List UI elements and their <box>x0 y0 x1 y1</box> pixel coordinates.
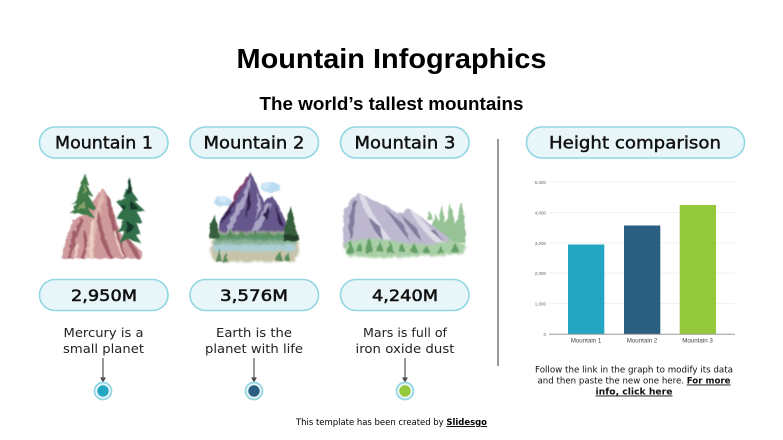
illustration: grey ridge with green forest <box>343 192 466 258</box>
heading pill: height comparison: Height comparison <box>549 134 721 154</box>
heading pill: mountain 3 <box>340 127 469 158</box>
heading pill: mountain 2 <box>190 127 318 158</box>
note: chart instructions: info, click here <box>596 386 672 398</box>
value pill: 2,950M <box>40 280 168 310</box>
illustration: pink mountain with pine trees <box>62 173 145 259</box>
y axis labels: 4,000 <box>535 210 546 216</box>
illustration: purple peaks with lake <box>209 173 299 262</box>
x axis labels: Mountain 2 <box>627 338 658 344</box>
description: mountain 1: small planet <box>63 341 144 356</box>
description: mountain 2: planet with life <box>205 341 303 356</box>
subtitle: The world’s tallest mountains <box>260 93 524 114</box>
heading pill: mountain 3: Mountain 3 <box>354 134 456 154</box>
value pill: 2,950M: 2,950M <box>71 286 137 305</box>
description: mountain 2: Earth is the <box>216 325 292 340</box>
heading pill: mountain 1 <box>40 127 168 158</box>
marker: mountain 3 <box>396 382 414 400</box>
marker: mountain 2 <box>246 382 262 400</box>
value pill: 4,240M: 4,240M <box>372 286 438 305</box>
bar: mountain 2 <box>624 226 660 334</box>
y axis labels: 3,000 <box>535 241 546 246</box>
note: chart instructions: Follow the link in the graph to modify its data <box>535 364 733 376</box>
heading pill: height comparison <box>526 127 744 158</box>
x axis labels <box>571 338 713 344</box>
heading pill: mountain 2: Mountain 2 <box>204 134 304 154</box>
value pill: 4,240M <box>340 280 469 310</box>
title: Mountain Infographics <box>236 43 546 74</box>
arrow: mountain 1 <box>101 358 105 382</box>
column: mountain 1 <box>40 127 168 400</box>
y axis labels <box>535 180 546 337</box>
value pill: 3,576M <box>190 280 318 310</box>
column: mountain 2 <box>190 127 318 400</box>
y axis labels: 5,000 <box>535 180 546 185</box>
y axis labels: 2,000 <box>535 271 546 276</box>
description: mountain 1: Mercury is a <box>64 325 144 340</box>
note: chart instructions: and then paste the new one here. For more <box>538 376 733 386</box>
arrow: mountain 3 <box>403 358 407 382</box>
marker: mountain 1 <box>94 382 112 400</box>
y axis labels: 0 <box>543 332 546 337</box>
footer credit: This template has been created by Slidesgo <box>295 417 487 428</box>
bar: mountain 3 <box>680 205 716 334</box>
bar: mountain 1 <box>568 244 604 334</box>
column: mountain 3 <box>340 127 469 400</box>
y axis labels: 1,000 <box>535 302 546 306</box>
description: mountain 3: Mars is full of <box>363 325 448 340</box>
heading pill: mountain 1: Mountain 1 <box>55 134 153 154</box>
x axis labels: Mountain 1 <box>571 338 602 344</box>
description: mountain 3: iron oxide dust <box>356 341 455 356</box>
bar chart: height comparison <box>535 180 735 344</box>
x axis labels: Mountain 3 <box>682 338 713 344</box>
value pill: 3,576M: 3,576M <box>220 286 288 305</box>
arrow: mountain 2 <box>252 358 256 382</box>
